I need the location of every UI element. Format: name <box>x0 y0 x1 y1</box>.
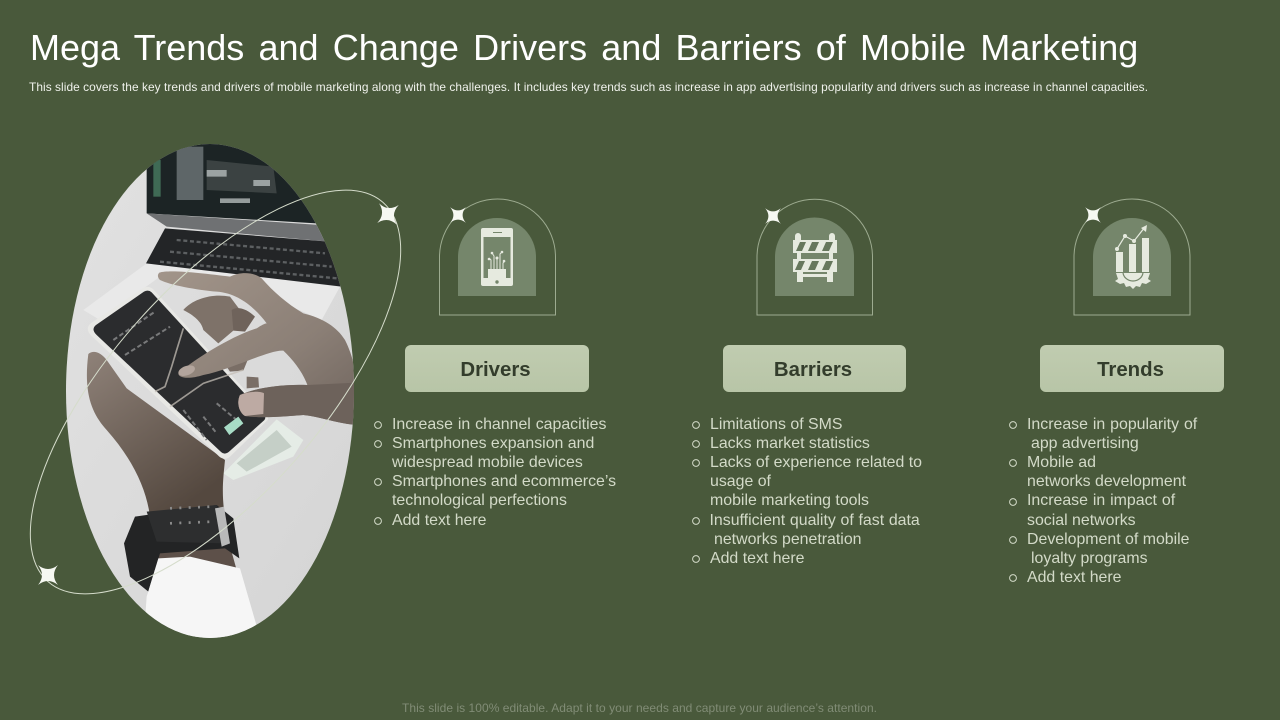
text block: trends list: social networks <box>1027 512 1136 529</box>
button: Trends: Trends <box>1097 359 1164 381</box>
orbit ring around photo <box>0 133 462 651</box>
footer note: This slide is 100% editable. Adapt it to your needs and capture your audience’s attention. <box>402 701 877 715</box>
text block: trends list: Development of mobile <box>1027 531 1190 548</box>
text block: drivers list: Smartphones and ecommerce’s <box>392 473 616 490</box>
text block: trends list: networks development <box>1027 473 1187 490</box>
text block: barriers list: Lacks of experience related to <box>710 454 922 471</box>
text block: drivers list: Add text here <box>392 512 487 529</box>
photo: hands using smartphone in oval frame <box>66 144 354 638</box>
text block: trends list: app advertising <box>1031 435 1139 452</box>
subtitle description: This slide covers the key trends and drivers of mobile marketing along with the challenges. It includes key trends such as increase in app advertising popularity and drivers such as increase in channel capacities. <box>29 80 1148 94</box>
button: Drivers <box>405 345 589 392</box>
fingers behind phone <box>183 296 240 343</box>
icon: barriers arch with road barrier <box>757 199 872 315</box>
text block: drivers list <box>375 416 616 529</box>
text block: trends list: Mobile ad <box>1027 454 1096 471</box>
text block: barriers list: Lacks market statistics <box>710 435 870 452</box>
text block: drivers list: widespread mobile devices <box>391 454 583 471</box>
title: Mega Trends and Change Drivers and Barriers of Mobile Marketing <box>30 27 1138 68</box>
button: Drivers: Drivers <box>460 359 531 381</box>
button: Barriers <box>723 345 906 392</box>
text block: trends list: Increase in impact of <box>1027 492 1176 509</box>
star: orbit bottom <box>28 555 68 595</box>
pointing finger nail <box>178 366 195 376</box>
watch <box>124 505 239 592</box>
text block: barriers list: usage of <box>710 473 772 490</box>
text block: barriers list <box>693 416 922 567</box>
star: orbit top <box>368 194 408 234</box>
hand: left palm and wrist <box>87 352 225 517</box>
thumb shading <box>238 383 357 425</box>
icon: drivers arch with smartphone <box>440 199 556 315</box>
icon: trends arch with rising chart and gear <box>1074 199 1190 315</box>
button: Trends <box>1040 345 1224 392</box>
hands and phone, close-up layer <box>87 271 357 517</box>
wrist below watch <box>155 548 236 569</box>
text block: barriers list: Limitations of SMS <box>710 416 842 433</box>
cuff <box>146 556 256 638</box>
text block: barriers list: mobile marketing tools <box>710 492 869 509</box>
text block: trends list <box>1010 416 1198 586</box>
text block: barriers list: networks penetration <box>714 531 862 548</box>
text block: barriers list: Insufficient quality of fast data <box>710 512 920 529</box>
text block: drivers list: technological perfections <box>392 492 567 509</box>
text block: drivers list: Increase in channel capacities <box>392 416 606 433</box>
right hand silhouette: index, pointing finger, thumb, back of hand <box>158 271 357 425</box>
text block: drivers list: Smartphones expansion and <box>392 435 594 452</box>
button: Barriers: Barriers <box>774 359 852 381</box>
bills <box>223 419 303 480</box>
text block: barriers list: Add text here <box>710 550 805 567</box>
phone <box>88 287 268 459</box>
text block: trends list: Increase in popularity of <box>1027 416 1198 433</box>
thumb nail <box>238 392 264 416</box>
text block: trends list: loyalty programs <box>1031 550 1148 567</box>
text block: trends list: Add text here <box>1027 569 1122 586</box>
